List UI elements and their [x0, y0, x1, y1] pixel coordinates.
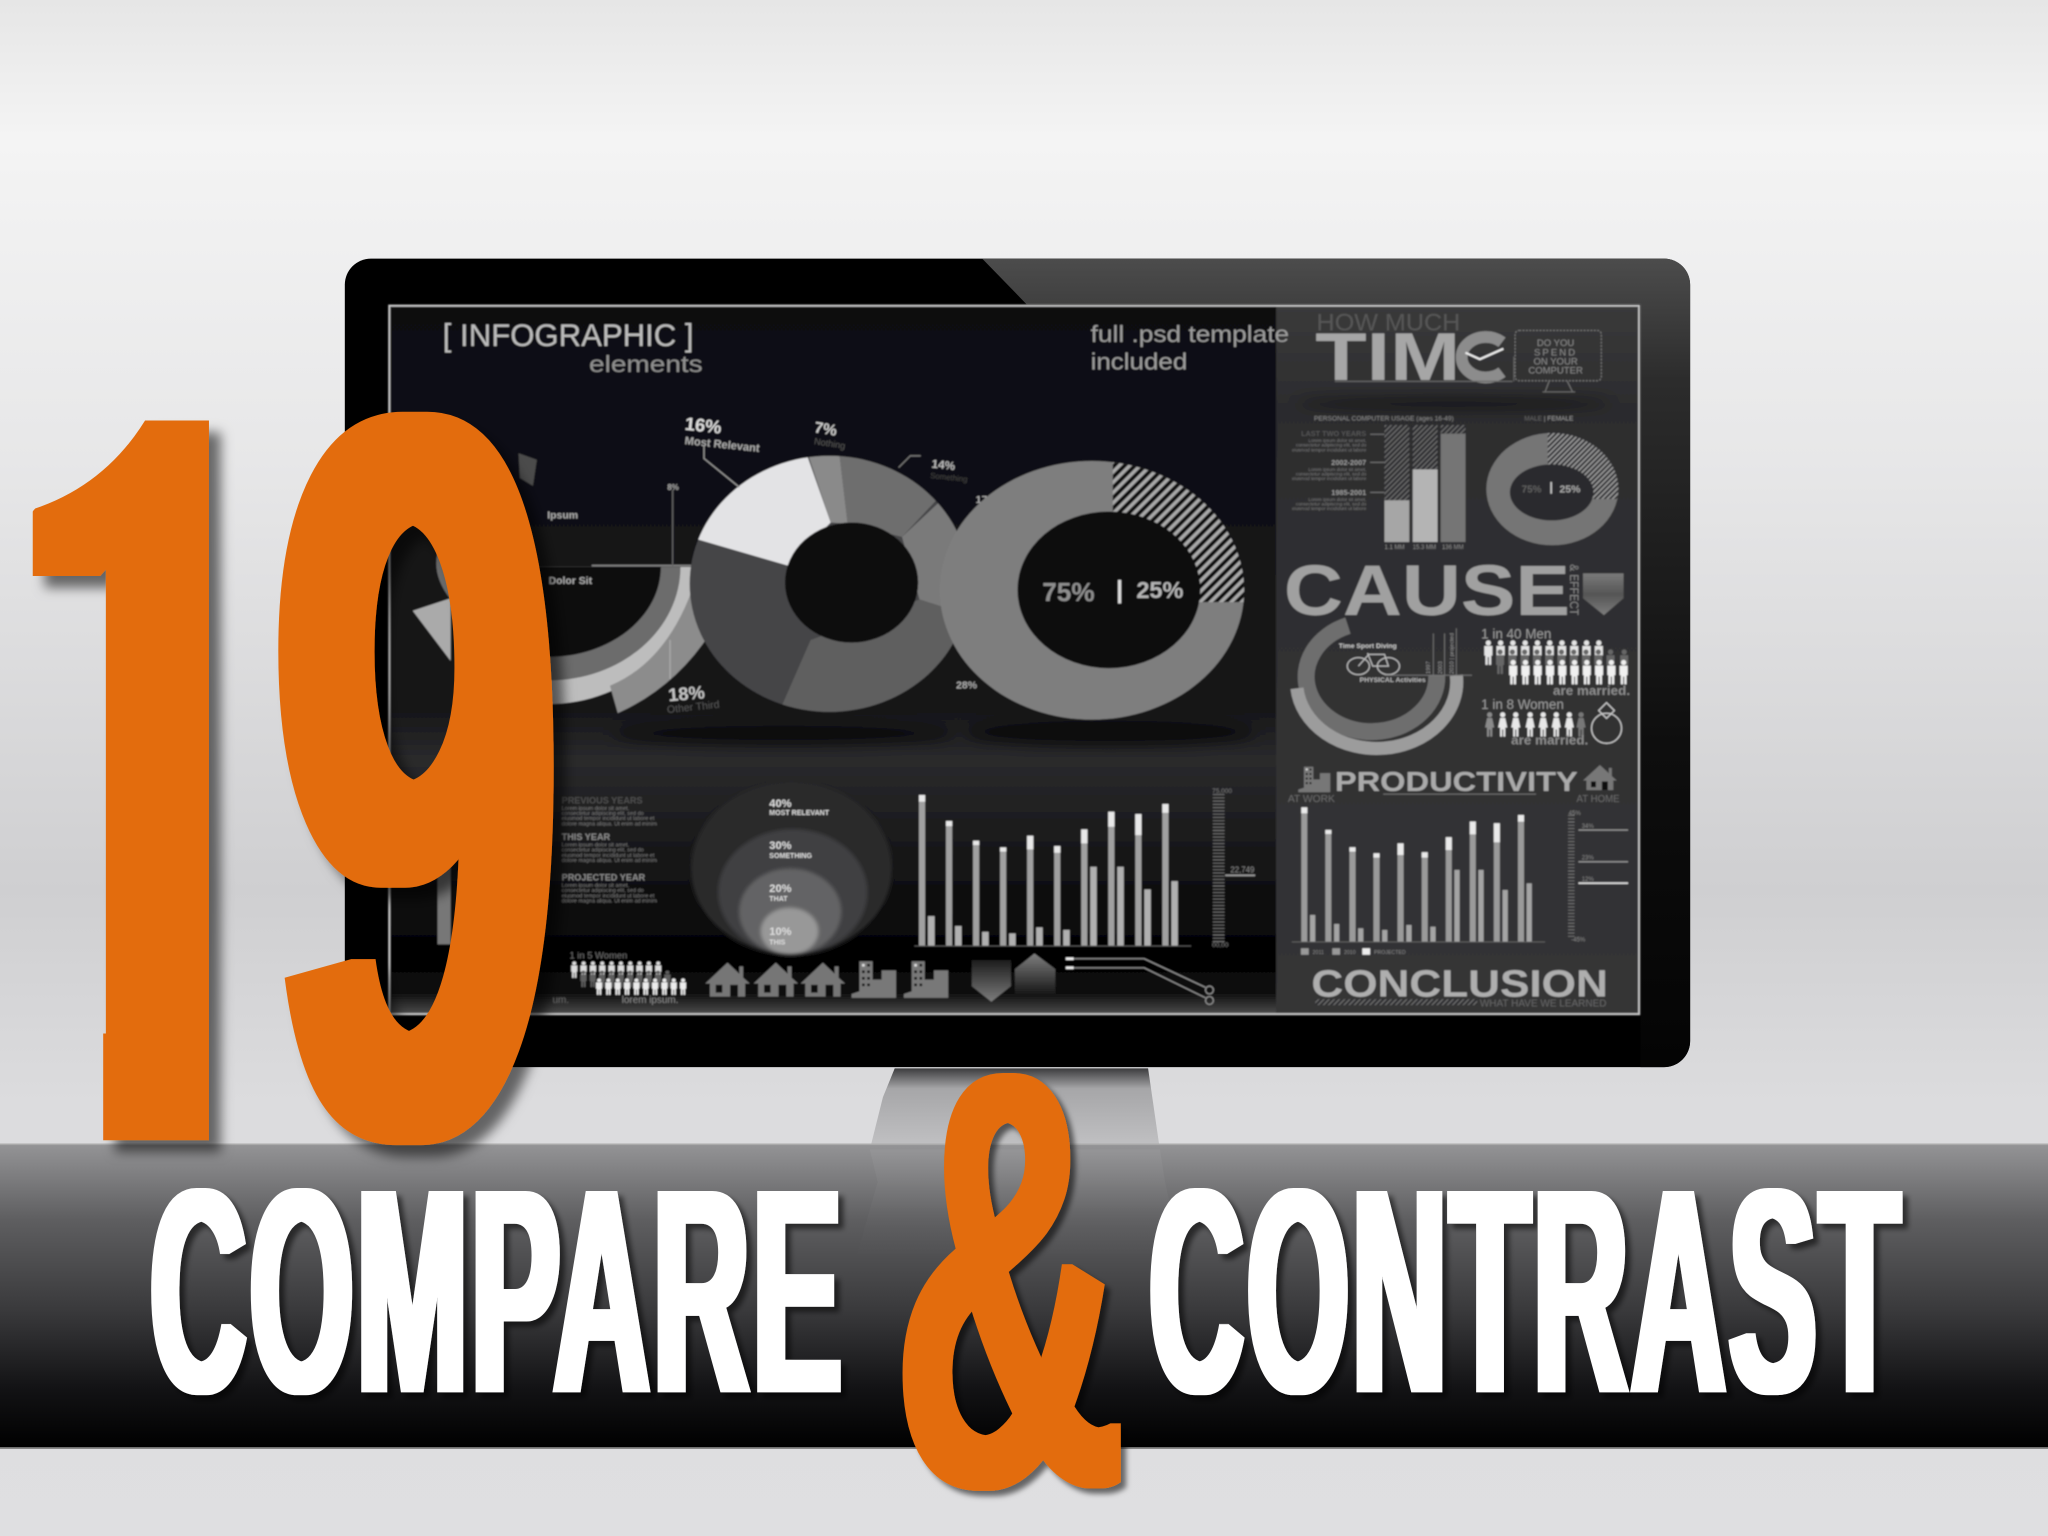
title shadow — [1297, 400, 1610, 407]
donut chart: male / female: 75% — [1522, 484, 1542, 495]
year text blocks: eiusmod tempor incididunt ut labore et — [562, 816, 655, 822]
year text blocks: PREVIOUS YEARS — [562, 795, 643, 805]
usage chart: 15.3 MM — [1413, 545, 1436, 551]
donut chart: 75 / 25 — [940, 461, 1244, 720]
heading: infographic elements: elements — [589, 351, 703, 377]
people: 1 in 5 women: lorem ipsum. — [622, 995, 678, 1006]
usage chart: eiusmod tempor incididunt ut labore — [1292, 447, 1367, 452]
scale: left: 75,000 — [1212, 788, 1232, 795]
scale: productivity: 34% — [1582, 824, 1594, 830]
people: 1 in 8 women: 1 in 8 Women — [1481, 697, 1564, 712]
bezel gloss — [982, 259, 1690, 1067]
scale: productivity — [1569, 811, 1628, 944]
people: 1 in 40 men: are married. — [1553, 683, 1630, 698]
arc chart: 2010 | projected — [1450, 633, 1456, 674]
small tab behind nine — [519, 453, 537, 486]
usage chart: consectetur adipiscing elit, sed do — [1296, 443, 1367, 448]
half ring chart: Dolor Sit — [549, 576, 593, 587]
usage chart: 1985-2001 — [1331, 488, 1366, 497]
screen left area — [389, 306, 1277, 1014]
donut labels — [667, 413, 987, 716]
year text blocks: eiusmod tempor incididunt ut labore et — [562, 853, 655, 859]
donut labels: 7% — [813, 419, 838, 440]
legend: PROJECTED — [1374, 950, 1406, 956]
year text blocks: consectetur adipiscing elit, sed do — [562, 811, 644, 817]
nested ellipse chart: 10% — [769, 926, 792, 938]
half ring chart: Ipsum — [547, 511, 578, 522]
arrow: up — [1015, 953, 1055, 997]
year text blocks — [562, 795, 657, 905]
banner — [0, 1144, 2048, 1449]
year text blocks: consectetur adipiscing elit, sed do — [562, 848, 644, 854]
people: 1 in 5 women: 1 in 5 Women — [569, 950, 627, 961]
people: 1 in 40 men — [1481, 627, 1630, 698]
usage chart: Lorem ipsum dolor sit amet, — [1308, 438, 1366, 443]
donut labels: 18% — [667, 681, 706, 705]
big number 19 — [32, 412, 572, 1164]
heading: infographic elements — [443, 318, 703, 377]
year text blocks: dolore magna aliqua. Ut enim ad minim — [562, 899, 657, 905]
heading: productivity — [1288, 765, 1620, 805]
usage chart: consectetur adipiscing elit, sed do — [1296, 471, 1367, 476]
usage chart: Lorem ipsum dolor sit amet, — [1308, 467, 1366, 472]
people: 1 in 5 women — [552, 950, 686, 1006]
icon: work building — [1298, 767, 1330, 792]
donut labels: 28% — [956, 680, 977, 691]
people: 1 in 5 women: um. — [552, 995, 569, 1006]
donut labels: 14% — [931, 458, 956, 473]
usage chart: Lorem ipsum dolor sit amet, — [1308, 497, 1366, 502]
year text blocks: eiusmod tempor incididunt ut labore et — [562, 893, 655, 899]
numeral 1: 1 — [0, 193, 304, 1362]
arc chart: 1997 — [1426, 661, 1432, 674]
usage chart: 1.1 MM — [1384, 545, 1405, 551]
heading: psd template note — [1091, 321, 1289, 375]
scale: productivity: 23% — [1582, 855, 1594, 861]
heading: cause & effect: CAUSE — [1284, 551, 1570, 631]
bar chart: productivity — [1292, 807, 1545, 956]
donut labels: 16% — [684, 413, 723, 438]
donut labels: Other Third — [667, 700, 720, 716]
donut chart: segments — [669, 446, 957, 713]
icon: dashed monitor question: ON YOUR — [1533, 356, 1578, 367]
screen border — [389, 306, 1639, 1014]
donut labels: Something — [930, 471, 968, 484]
donut chart: 75 / 25: 25% — [1136, 577, 1183, 603]
heading: conclusion: CONCLUSION — [1311, 964, 1608, 1006]
heading: psd template note: full .psd template — [1091, 321, 1289, 347]
usage chart: 136 MM — [1442, 545, 1464, 551]
nested ellipse chart: 20% — [769, 883, 792, 895]
usage chart: LAST TWO YEARS — [1301, 429, 1366, 438]
icon: home — [1583, 765, 1617, 790]
donut chart: 75 / 25: 75% — [1042, 577, 1095, 607]
title: how much time — [1315, 309, 1514, 395]
scale: productivity: 12% — [1582, 877, 1594, 883]
heading: conclusion: WHAT HAVE WE LEARNED — [1480, 998, 1607, 1009]
donut chart: male / female: MALE | FEMALE — [1524, 416, 1574, 423]
usage chart: PERSONAL COMPUTER USAGE (ages 16-49) — [1314, 416, 1454, 423]
heading: psd template note: included — [1091, 349, 1187, 375]
legend: 2011 — [1313, 950, 1324, 956]
donut labels: Most Relevant — [684, 435, 760, 455]
arc chart — [1297, 626, 1472, 748]
scale: left — [1212, 788, 1255, 949]
year text blocks: THIS YEAR — [562, 832, 611, 842]
usage chart: 2002-2007 — [1331, 458, 1366, 467]
year text blocks: Lorem ipsum dolor sit amet, — [562, 842, 630, 848]
usage chart: consectetur adipiscing elit, sed do — [1296, 501, 1367, 506]
icons: houses — [705, 963, 845, 997]
donut labels: 17 — [976, 495, 987, 506]
donut chart: male / female — [1486, 416, 1618, 545]
people: 1 in 40 men: 1 in 40 Men — [1481, 627, 1551, 642]
nested ellipse chart — [691, 782, 892, 955]
legend — [1301, 948, 1406, 956]
icon: dashed monitor question: DO YOU — [1537, 338, 1574, 349]
heading: productivity: PRODUCTIVITY — [1335, 766, 1578, 797]
nested ellipse chart: THIS — [769, 939, 786, 946]
title: how much time: HOW MUCH — [1317, 309, 1460, 336]
arc chart: 2003 — [1438, 661, 1444, 674]
donut labels: Nothing — [813, 436, 846, 451]
year text blocks: consectetur adipiscing elit, sed do — [562, 888, 644, 894]
monitor — [345, 259, 1690, 1149]
people: 1 in 8 women — [1481, 697, 1622, 747]
icon: dashed monitor question — [1515, 330, 1601, 392]
heading: cause & effect: & EFFECT — [1567, 564, 1580, 615]
connector lines — [1066, 957, 1213, 1004]
heading: productivity: AT WORK — [1288, 794, 1335, 805]
usage chart — [1292, 416, 1465, 551]
heading: productivity: AT HOME — [1576, 794, 1620, 805]
usage chart: eiusmod tempor incididunt ut labore — [1292, 476, 1367, 481]
nested ellipse chart: 30% — [769, 840, 792, 852]
icon: ring — [1592, 703, 1622, 743]
monitor bezel — [345, 259, 1690, 1067]
nested ellipse chart: MOST RELEVANT — [769, 810, 830, 817]
scale: productivity: 45% — [1569, 811, 1581, 817]
year text blocks: PROJECTED YEAR — [562, 872, 646, 882]
stand reflection on banner — [856, 1149, 1182, 1260]
icon: clock — [1462, 337, 1503, 377]
screen right column — [1276, 306, 1639, 1014]
year text blocks: dolore magna aliqua. Ut enim ad minim — [562, 858, 657, 864]
year text blocks: Lorem ipsum dolor sit amet, — [562, 883, 630, 889]
donut chart: male / female: 25% — [1560, 484, 1580, 495]
arrow: down — [972, 960, 1011, 1002]
scale: productivity: -45% — [1571, 938, 1586, 944]
usage chart: eiusmod tempor incididunt ut labore — [1292, 506, 1367, 511]
year text blocks: dolore magna aliqua. Ut enim ad minim — [562, 821, 657, 827]
half ring chart — [412, 482, 706, 946]
screen — [389, 306, 1639, 1014]
numeral 9: 9 — [272, 198, 561, 1355]
scale: left: 00,00 — [1212, 942, 1229, 949]
heading: infographic elements: [ INFOGRAPHIC ] — [443, 318, 694, 353]
arc chart: Time Sport Diving — [1339, 643, 1397, 650]
arc chart: PHYSICAL Activities — [1360, 677, 1426, 684]
nested ellipse chart: THAT — [769, 896, 788, 903]
bar chart: left — [914, 795, 1191, 946]
monitor stand — [870, 1068, 1160, 1149]
infographic canvas: COMPARE — [150, 1127, 845, 1454]
title: how much time: TIM — [1315, 320, 1460, 395]
half ring chart: 8% — [667, 483, 679, 492]
icon: dashed monitor question: COMPUTER — [1528, 366, 1583, 377]
icon: shield arrow — [1583, 573, 1624, 615]
people: 1 in 8 women: are married. — [1511, 732, 1588, 747]
year text blocks: Lorem ipsum dolor sit amet, — [562, 806, 630, 812]
icon: dashed monitor question: SPEND — [1534, 347, 1577, 358]
nested ellipse chart: 40% — [769, 798, 792, 810]
nested ellipse chart: SOMETHING — [769, 853, 812, 860]
floor shadows — [614, 721, 1254, 744]
icons: buildings — [852, 961, 948, 998]
scale: left: 22,749 — [1230, 865, 1254, 874]
legend: 2010 — [1344, 950, 1356, 956]
icon: bicycle — [1347, 653, 1400, 675]
